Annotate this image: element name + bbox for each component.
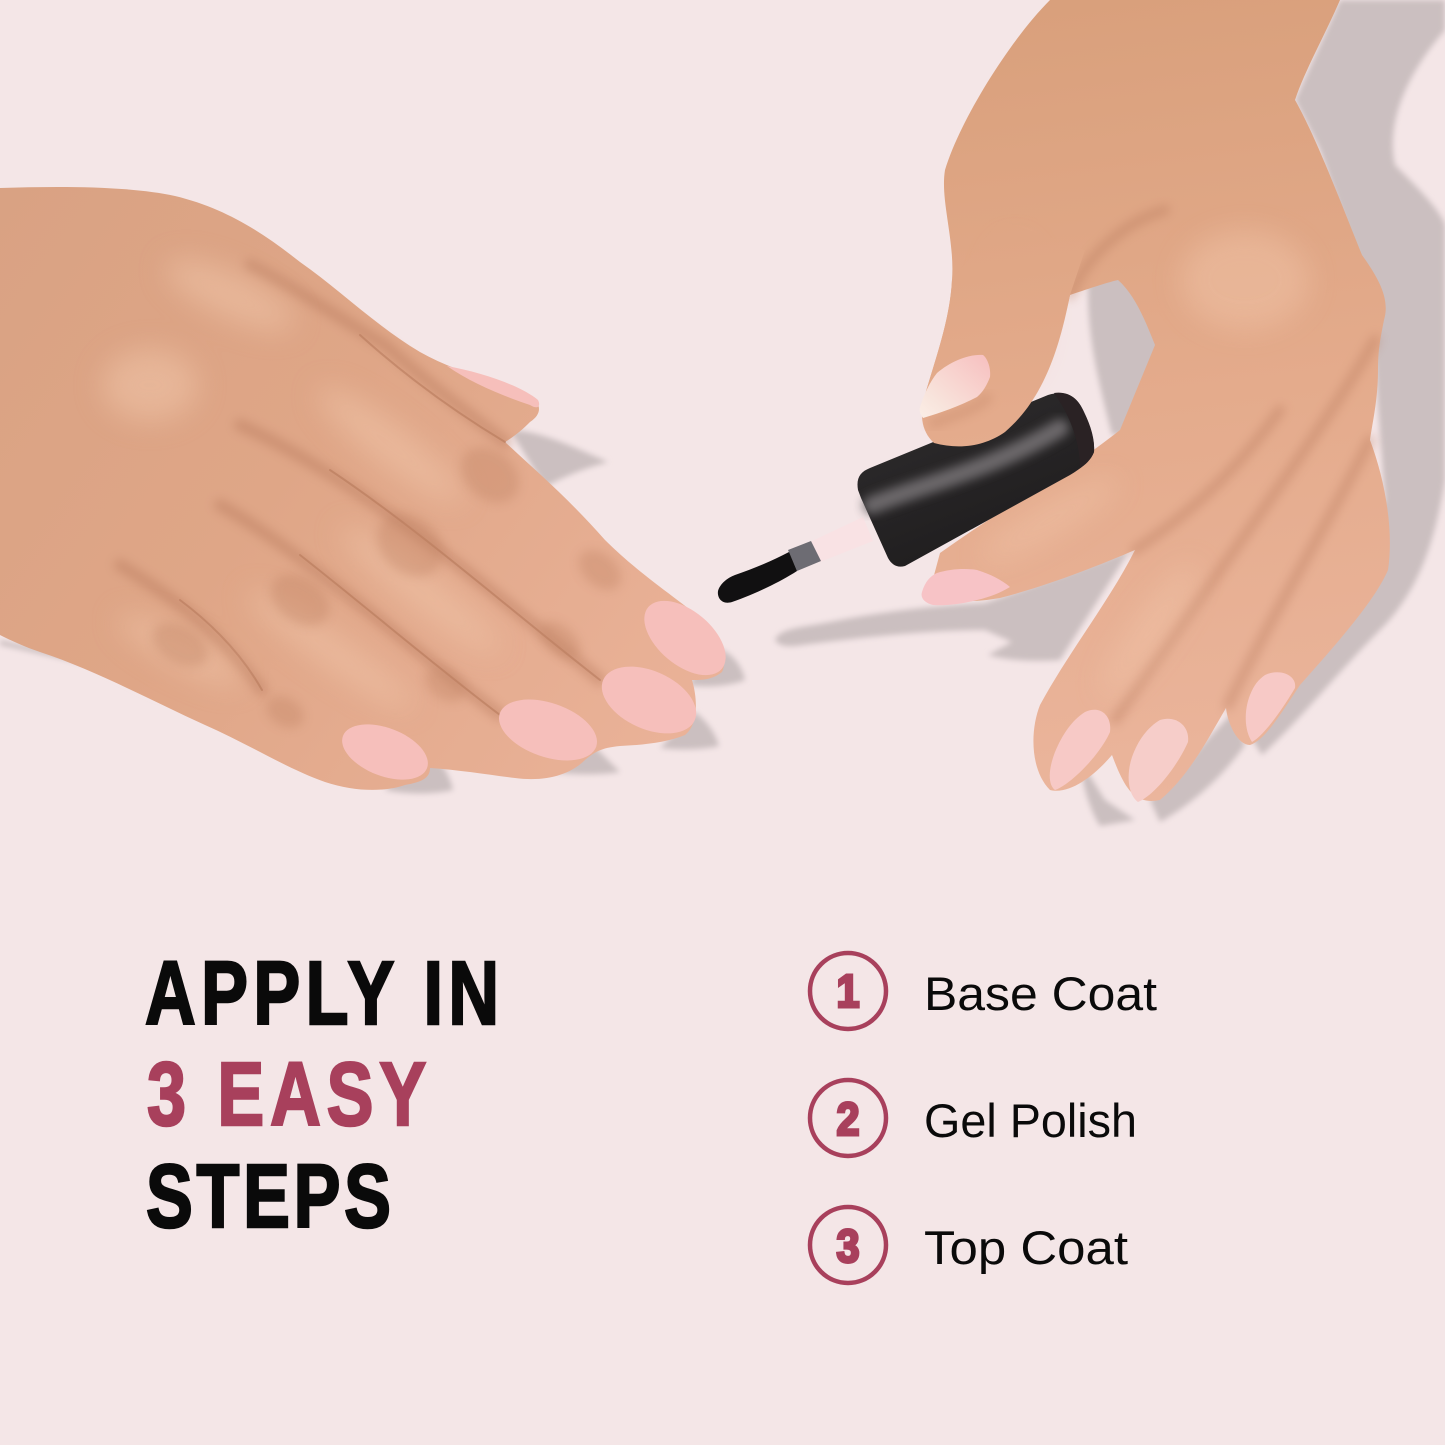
step 2 badge: 2 <box>836 1094 860 1146</box>
brush bristles <box>718 552 797 603</box>
nail polish brush <box>718 393 1094 603</box>
step 1 <box>810 953 1157 1029</box>
right hand highlights <box>973 230 1310 706</box>
step 1 badge <box>810 953 886 1029</box>
steps list <box>810 953 1157 1283</box>
step 2 badge <box>810 1080 886 1156</box>
step 1 badge: 1 <box>836 966 860 1018</box>
step 2 <box>810 1080 1137 1156</box>
step 1 label: Base Coat <box>924 967 1157 1020</box>
cap end <box>1054 393 1094 468</box>
step 3 label: Top Coat <box>924 1221 1128 1274</box>
step 3 badge <box>810 1207 886 1283</box>
right hand back and fingers <box>923 0 1390 801</box>
knuckle creases <box>145 436 629 734</box>
finger folds <box>180 335 600 715</box>
hand cast shadows <box>0 0 1445 826</box>
title <box>145 944 499 1247</box>
step 2 label: Gel Polish <box>924 1094 1137 1147</box>
step 3 badge: 3 <box>836 1221 860 1273</box>
left hand palm and fingers <box>0 187 724 790</box>
title line 1: APPLY IN <box>145 944 499 1044</box>
brush ferrule <box>788 541 821 571</box>
thumb tip <box>922 220 1085 446</box>
finger shading <box>120 265 600 715</box>
step 3 <box>810 1207 1128 1283</box>
knuckle highlights <box>102 245 510 720</box>
thumb underside shading <box>930 395 990 425</box>
title line 2: 3 EASY <box>147 1045 426 1145</box>
bottle cap <box>858 393 1094 567</box>
left hand <box>0 187 739 791</box>
thumb over the cap <box>920 220 1085 446</box>
title line 3: STEPS <box>146 1147 391 1247</box>
left hand nails <box>334 366 739 791</box>
clear brush stem <box>810 517 873 562</box>
thumb nail <box>920 355 990 418</box>
right hand nails <box>922 569 1295 802</box>
right hand <box>922 0 1390 802</box>
finger shading <box>1070 210 1375 720</box>
cap sheen <box>872 428 1060 505</box>
